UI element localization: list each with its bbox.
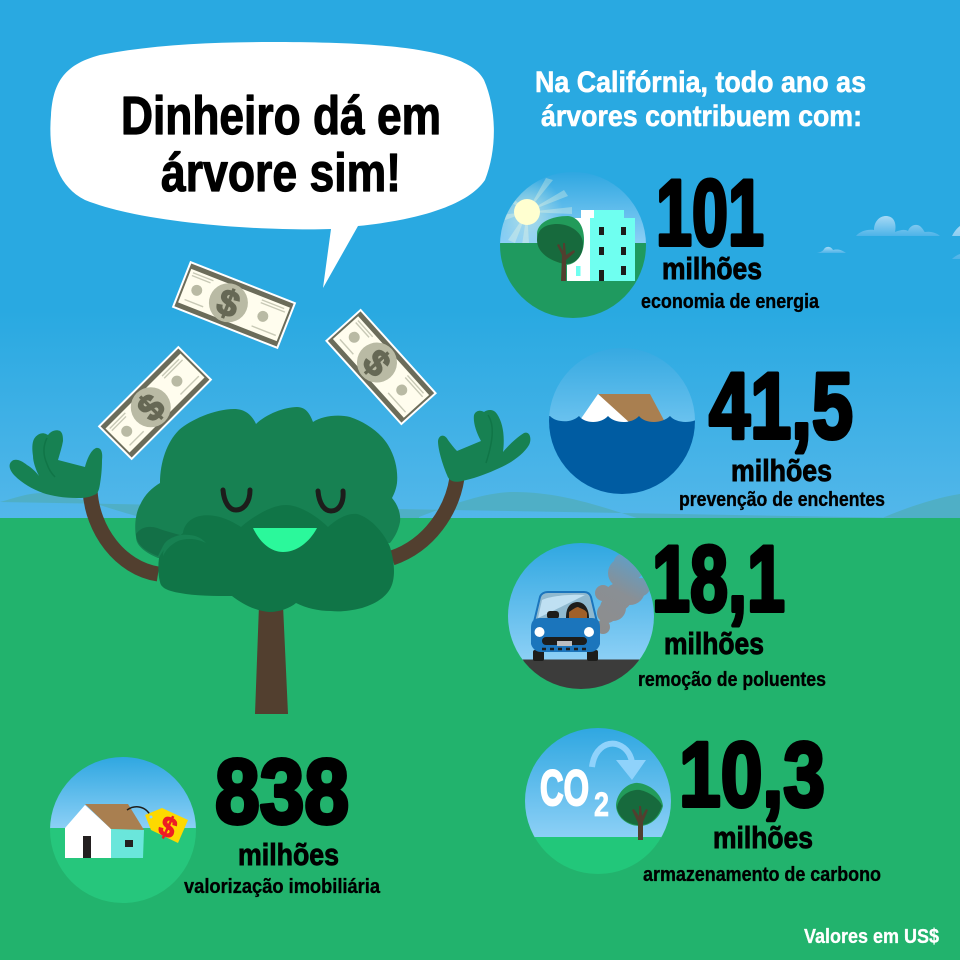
title: árvore sim! bbox=[161, 143, 401, 203]
falling dollar bill, right: $ bbox=[354, 342, 399, 385]
panel: property value bbox=[50, 757, 380, 903]
heading: California contribution: Na Califórnia, todo ano as bbox=[535, 66, 866, 99]
tree trunk bbox=[255, 605, 288, 714]
value: 41,5: 41,5 bbox=[709, 353, 853, 458]
value: 101: 101 bbox=[656, 160, 764, 265]
tree arms bbox=[90, 478, 457, 574]
falling dollar bill, right bbox=[325, 309, 437, 425]
icon: house with price tag bbox=[50, 757, 196, 903]
panel: energy savings bbox=[500, 174, 820, 318]
value: 18,1: 18,1 bbox=[652, 526, 785, 631]
unit: milhões: milhões bbox=[664, 626, 764, 661]
falling dollar bill, top: $ bbox=[211, 280, 246, 326]
tree crown, lower foliage bbox=[158, 505, 394, 612]
icon: CO2 absorbed by tree bbox=[525, 728, 671, 874]
falling dollar bill, left bbox=[98, 346, 212, 460]
icon: flooded house bbox=[549, 354, 695, 494]
mouth bbox=[253, 528, 317, 552]
icon: car with smoke bbox=[508, 543, 654, 689]
left hand finger line bbox=[44, 438, 55, 477]
icon: CO2 absorbed by tree: CO bbox=[540, 760, 589, 816]
icon: price tag bbox=[145, 808, 188, 846]
caption: remoção de poluentes: remoção de poluentes bbox=[638, 669, 826, 691]
icon: building and sun bbox=[491, 172, 646, 323]
caption: prevenção de enchentes: prevenção de enchentes bbox=[679, 489, 885, 511]
heading: California contribution: árvores contribuem com: bbox=[541, 100, 862, 133]
right hand bbox=[438, 410, 530, 482]
unit: milhões: milhões bbox=[662, 251, 762, 286]
left hand bbox=[10, 430, 102, 498]
value: 10,3: 10,3 bbox=[679, 724, 825, 826]
title: Dinheiro dá em bbox=[121, 86, 441, 146]
unit: milhões: milhões bbox=[713, 820, 813, 855]
right hand finger line bbox=[486, 415, 492, 463]
caption: armazenamento de carbono: armazenamento de carbono bbox=[643, 864, 881, 886]
footnote: Valores em US$ bbox=[804, 926, 939, 948]
panel: pollutant removal bbox=[508, 543, 826, 690]
value: 838: 838 bbox=[215, 741, 349, 843]
speech bubble bbox=[50, 42, 494, 288]
caption: economia de energia: economia de energia bbox=[641, 291, 820, 313]
panel: flood prevention bbox=[545, 348, 885, 511]
left eye bbox=[223, 490, 250, 510]
falling dollar bill, left: $ bbox=[129, 386, 173, 429]
background: ground bbox=[0, 518, 960, 960]
title bbox=[121, 86, 441, 203]
background: distant hills bbox=[0, 492, 960, 519]
background: sky bbox=[0, 0, 960, 519]
clouds bbox=[817, 216, 960, 259]
heading: California contribution bbox=[535, 66, 866, 133]
tree crown, shading bbox=[136, 527, 180, 556]
right eye bbox=[318, 491, 343, 511]
icon: price tag: $ bbox=[154, 810, 182, 846]
unit: milhões: milhões bbox=[731, 453, 832, 488]
falling dollar bill, top bbox=[172, 261, 296, 349]
panel: carbon storage bbox=[520, 724, 881, 886]
icon: CO2 absorbed by tree: 2 bbox=[594, 786, 609, 824]
caption: valorização imobiliária: valorização imobiliária bbox=[184, 876, 381, 898]
tree character bbox=[10, 407, 530, 714]
tree crown, upper bbox=[135, 407, 400, 558]
unit: milhões: milhões bbox=[238, 837, 339, 872]
